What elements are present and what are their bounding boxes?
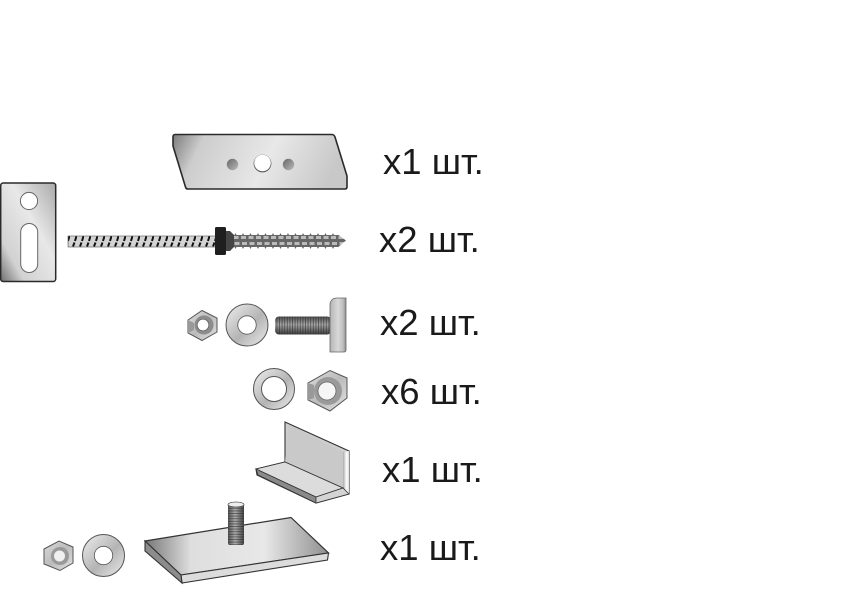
vertical slotted plate xyxy=(1,183,56,282)
washer with small hole xyxy=(226,304,268,346)
angled mounting plate with three holes xyxy=(173,134,347,189)
hanger bolt with threaded rod and collar xyxy=(68,227,346,255)
label: x6 washers and nuts: x6 шт. xyxy=(381,371,482,412)
label: x1 plate: x1 шт. xyxy=(383,141,484,182)
large hex nut xyxy=(308,370,347,411)
label: x2 hanger bolt: x2 шт. xyxy=(379,219,480,260)
base plate with threaded stud xyxy=(145,502,328,583)
large flat washer xyxy=(254,368,294,410)
label: x2 T-bolt: x2 шт. xyxy=(380,302,481,343)
washer lower xyxy=(82,534,124,576)
small hex nut xyxy=(188,310,217,340)
small hex nut lower xyxy=(44,541,73,570)
T-head bolt xyxy=(275,298,346,352)
L-shaped angle bracket xyxy=(256,422,349,503)
label: x1 angle bracket: x1 шт. xyxy=(382,449,483,490)
label: x1 base plate: x1 шт. xyxy=(380,527,481,568)
